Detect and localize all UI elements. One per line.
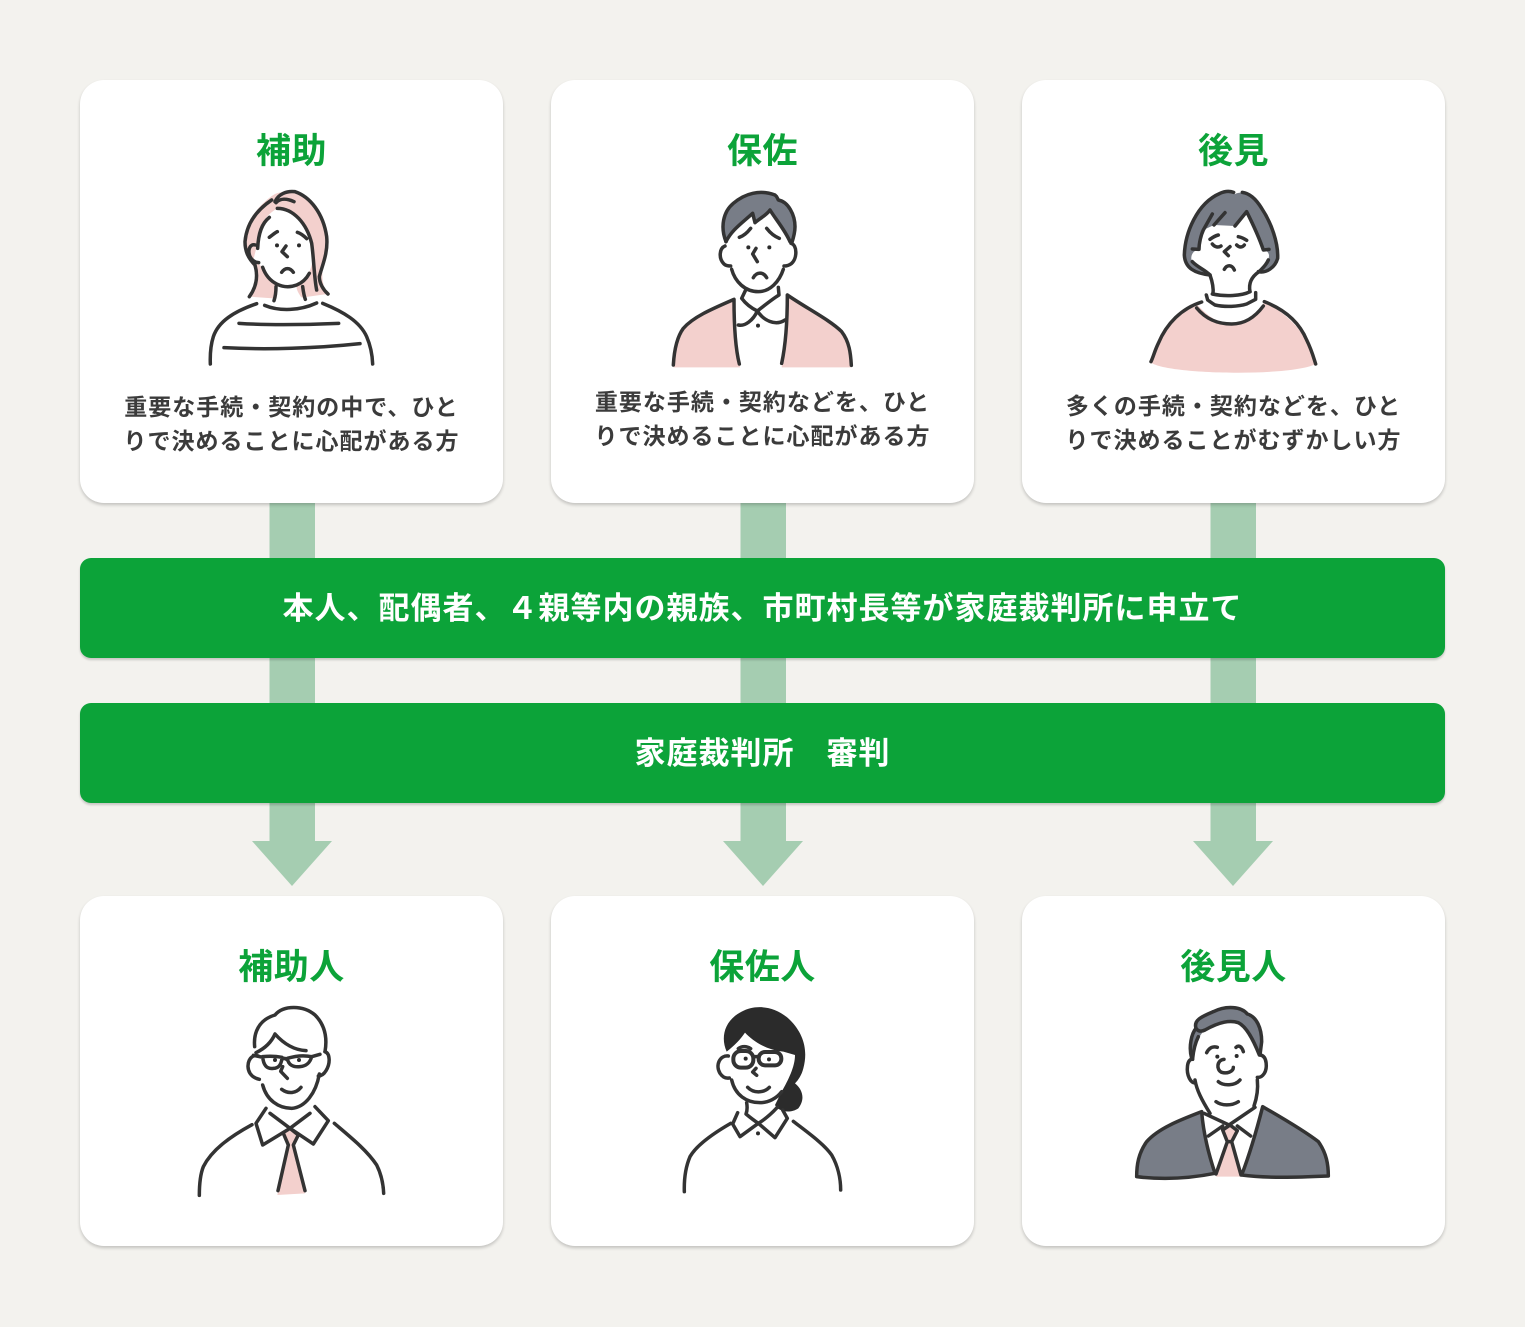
heading: 保佐人: 保佐人	[709, 948, 816, 987]
description text: 重要な手続・契約などを、ひと りで決めることに心配がある方	[594, 389, 930, 449]
panel: 後見	[1022, 80, 1445, 503]
icon: worried older woman with bob hair	[1149, 190, 1318, 373]
bar: family court ruling	[80, 703, 1445, 803]
heading: 保佐: 保佐	[727, 132, 798, 171]
panel: 補助人	[80, 896, 503, 1246]
heading: 補助: 補助	[256, 132, 327, 171]
description text: 重要な手続・契約の中で、ひと りで決めることに心配がある方	[124, 394, 460, 454]
description text: 多くの手続・契約などを、ひと りで決めることがむずかしい方	[1066, 393, 1402, 453]
heading: 補助人: 補助人	[238, 948, 345, 987]
panel: 保佐人	[551, 896, 974, 1246]
bar: petition to family court: 本人、配偶者、４親等内の親族、市町村長等が家庭裁判所に申立て	[282, 591, 1242, 626]
icon: man with glasses and pink tie	[198, 1006, 386, 1198]
arrow: 後見	[1193, 500, 1273, 886]
heading: 後見: 後見	[1198, 132, 1269, 171]
heading: 後見人: 後見人	[1180, 948, 1287, 987]
bar: family court ruling: 家庭裁判所 審判	[634, 736, 890, 771]
icon: woman with black hair and glasses	[682, 1007, 842, 1194]
arrow: 保佐	[723, 500, 803, 886]
panel: 保佐	[551, 80, 974, 503]
bar: petition to family court	[80, 558, 1445, 658]
icon: worried man in pink cardigan	[672, 190, 854, 368]
icon: man in gray suit and pink tie	[1134, 1006, 1330, 1180]
panel: 補助	[80, 80, 503, 503]
icon: worried woman with pink hair	[208, 190, 374, 366]
panel: 後見人	[1022, 896, 1445, 1246]
arrow: 補助	[252, 500, 332, 886]
